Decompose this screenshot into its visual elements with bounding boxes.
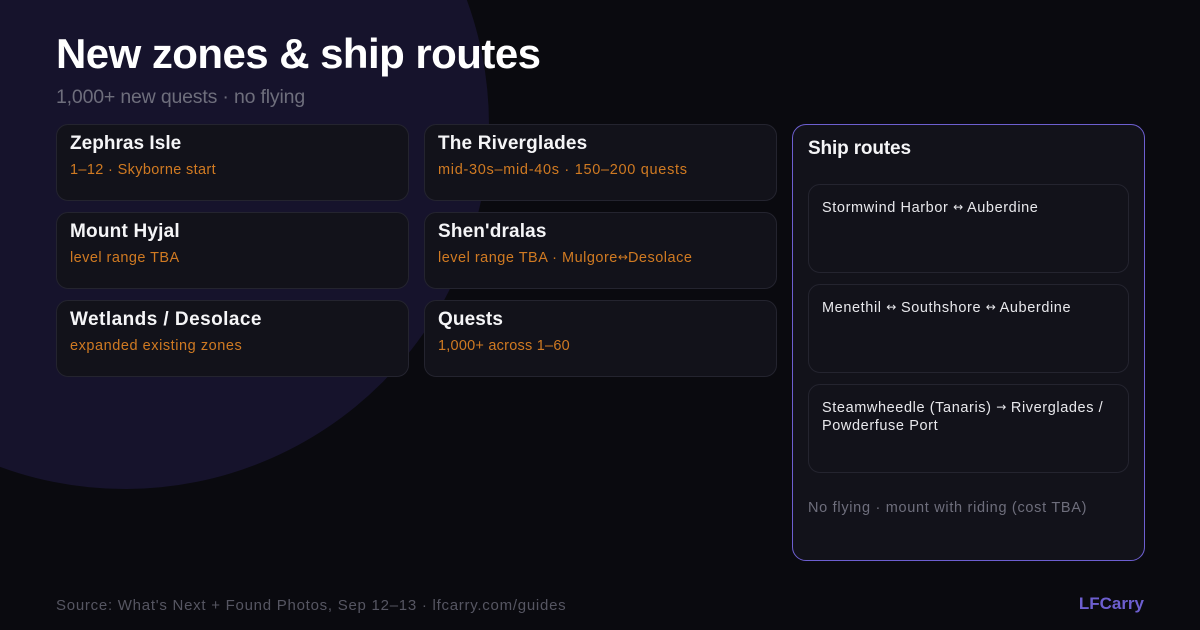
card: Wetlands / Desolace: Wetlands / Desolace bbox=[70, 309, 262, 330]
card: Wetlands / Desolace: expanded existing zones bbox=[70, 338, 242, 354]
card: Mount Hyjal: level range TBA bbox=[70, 250, 180, 266]
panel: ship routes bbox=[792, 124, 1145, 561]
card: Zephras Isle: 1–12 · Skyborne start bbox=[70, 162, 216, 178]
card: Shen'dralas: Shen'dralas bbox=[438, 221, 547, 242]
card: Zephras Isle bbox=[56, 124, 409, 201]
card: Zephras Isle: Zephras Isle bbox=[70, 133, 181, 154]
subtitle: 1,000+ new quests · no flying bbox=[56, 86, 305, 108]
title: New zones & ship routes bbox=[56, 30, 540, 77]
card: Quests: 1,000+ across 1–60 bbox=[438, 338, 570, 354]
panel note: No flying · mount with riding (cost TBA) bbox=[808, 500, 1087, 516]
card: Shen'dralas bbox=[424, 212, 777, 289]
card: Mount Hyjal bbox=[56, 212, 409, 289]
card: The Riverglades bbox=[424, 124, 777, 201]
card: Shen'dralas: level range TBA · Mulgore↔Desolace bbox=[438, 250, 692, 266]
footer source: Source: What's Next + Found Photos, Sep 12–13 · lfcarry.com/guides bbox=[56, 597, 566, 614]
brand: LFCarry bbox=[1079, 594, 1144, 613]
route: Stormwind Harbor to Auberdine bbox=[808, 184, 1129, 273]
card: Quests bbox=[424, 300, 777, 377]
card: The Riverglades: The Riverglades bbox=[438, 133, 587, 154]
route: Stormwind Harbor to Auberdine: Stormwind Harbor ↔ Auberdine bbox=[822, 200, 1038, 216]
panel heading: Ship routes bbox=[808, 138, 911, 159]
route: Menethil, Southshore, Auberdine bbox=[808, 284, 1129, 373]
route: Steamwheedle to Riverglades: Steamwheedle (Tanaris) → Riverglades / bbox=[822, 400, 1103, 416]
card: The Riverglades: mid-30s–mid-40s · 150–200 quests bbox=[438, 162, 688, 178]
card: Mount Hyjal: Mount Hyjal bbox=[70, 221, 180, 242]
card: Quests: Quests bbox=[438, 309, 503, 330]
route: Steamwheedle to Riverglades bbox=[808, 384, 1129, 473]
route: Menethil, Southshore, Auberdine: Menethil ↔ Southshore ↔ Auberdine bbox=[822, 300, 1071, 316]
route: Steamwheedle to Riverglades: Powderfuse Port bbox=[822, 418, 938, 434]
background circle bbox=[0, 0, 489, 489]
card: Wetlands / Desolace bbox=[56, 300, 409, 377]
